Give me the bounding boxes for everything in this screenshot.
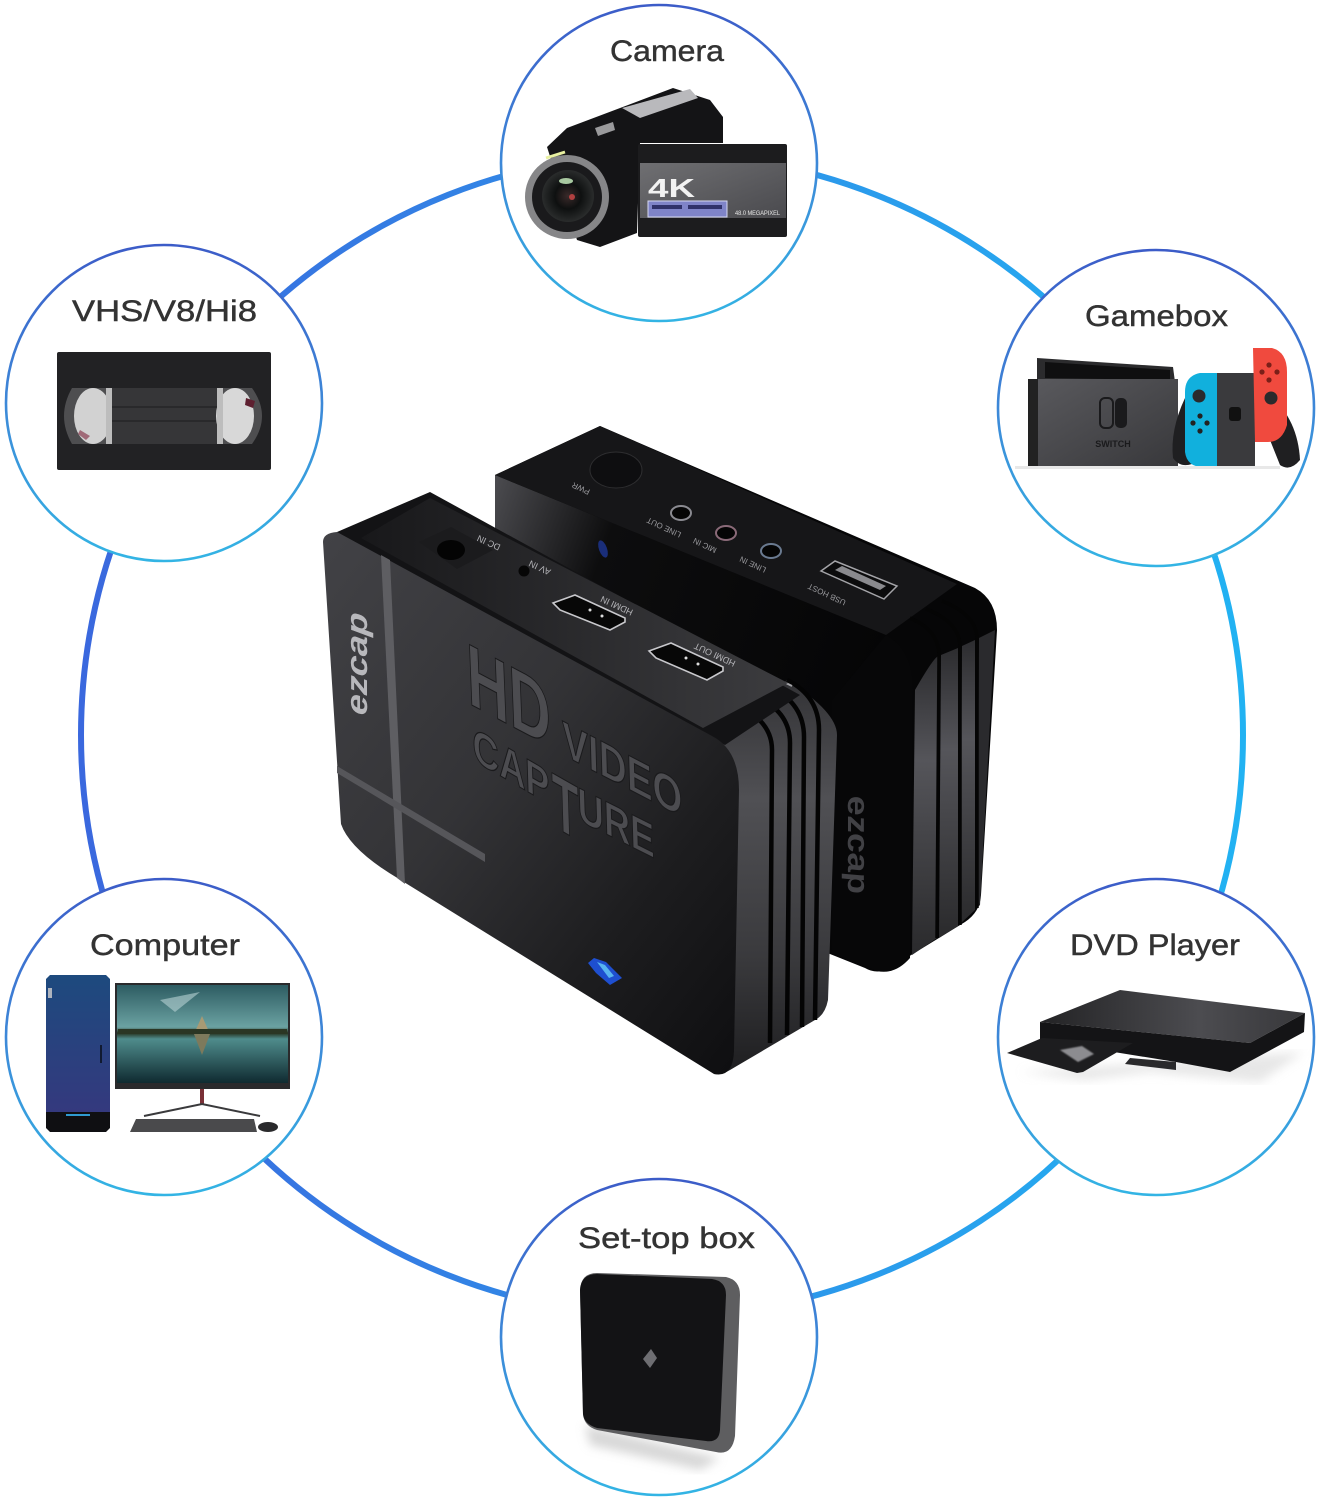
- device: front capture unit: [323, 492, 837, 1075]
- heading: VHS/V8/Hi8: VHS/V8/Hi8: [72, 295, 257, 328]
- embossed title: HD VIDEO CAPTURE: T: [551, 756, 580, 858]
- rear unit top face: [495, 426, 957, 635]
- blue LED: [588, 958, 622, 985]
- embossed title: HD VIDEO CAPTURE: VIDEO: [562, 710, 683, 828]
- panel: DVD player: [998, 879, 1314, 1195]
- rear port labels: LINE IN: [738, 554, 768, 574]
- connecting ring: [81, 154, 1243, 1316]
- heading: Computer: Computer: [90, 929, 240, 962]
- panel: camera: [501, 5, 817, 321]
- rear logo: ezcap: ezcap: [841, 793, 874, 896]
- icon: DVD player: [1007, 990, 1305, 1082]
- heading: DVD Player: DVD Player: [1070, 929, 1240, 962]
- rear unit body: [495, 426, 997, 972]
- USB port: [821, 561, 897, 599]
- power button: [590, 452, 642, 488]
- front port labels: HDMI OUT: [692, 641, 737, 669]
- icon: desktop computer: [46, 975, 290, 1132]
- front port labels: AV IN: [527, 558, 552, 577]
- icon: game console: SWITCH: [1095, 439, 1131, 449]
- icon: game console: [1015, 348, 1300, 469]
- rear port labels: LINE OUT: [645, 515, 683, 539]
- side grooves: [740, 680, 819, 1043]
- side notch highlights: [739, 683, 792, 712]
- icon: set-top box: [580, 1273, 740, 1470]
- front logo: ezcap: ezcap: [341, 610, 374, 717]
- AV socket: [518, 566, 530, 576]
- rear port labels: USB HOST: [806, 582, 847, 607]
- panel: computer: [6, 879, 322, 1195]
- embossed title: HD VIDEO CAPTURE: HD: [465, 625, 553, 767]
- HDMI OUT port: [649, 643, 723, 680]
- icon: camcorder: 48.0 MEGAPIXEL: [735, 211, 781, 217]
- rear LED: [596, 539, 610, 559]
- front port labels: HDMI IN: [599, 594, 634, 618]
- front port labels: DC IN: [476, 533, 502, 552]
- front unit side body: [714, 680, 837, 1074]
- embossed title: HD VIDEO CAPTURE: [465, 625, 683, 869]
- heading: Camera: Camera: [610, 35, 724, 68]
- icon: camcorder: 4K: [648, 173, 695, 203]
- icon: VHS cassette: [57, 352, 271, 470]
- rear port labels: MIC IN: [692, 536, 718, 555]
- front face: [323, 532, 739, 1075]
- panel: gamebox: [998, 250, 1314, 566]
- device: rear capture unit: [495, 426, 997, 972]
- icon: camcorder: [525, 88, 787, 247]
- audio jacks: [671, 506, 781, 558]
- panel: VHS: [6, 245, 322, 561]
- heading: Gamebox: Gamebox: [1085, 300, 1228, 333]
- front port labels: [476, 533, 737, 669]
- rear port labels: [570, 480, 847, 607]
- rear port labels: PWR: [570, 480, 591, 496]
- panel: set-top box: [501, 1179, 817, 1495]
- DC socket: [419, 527, 493, 569]
- HDMI IN port: [553, 595, 625, 630]
- rear unit side: [832, 635, 913, 972]
- face stripes: [337, 555, 485, 884]
- embossed title: HD VIDEO CAPTURE: CAP: [472, 716, 550, 815]
- front unit top face: [337, 492, 800, 745]
- embossed title: HD VIDEO CAPTURE: URE: [577, 778, 655, 869]
- heading: Set-top box: Set-top box: [578, 1222, 755, 1255]
